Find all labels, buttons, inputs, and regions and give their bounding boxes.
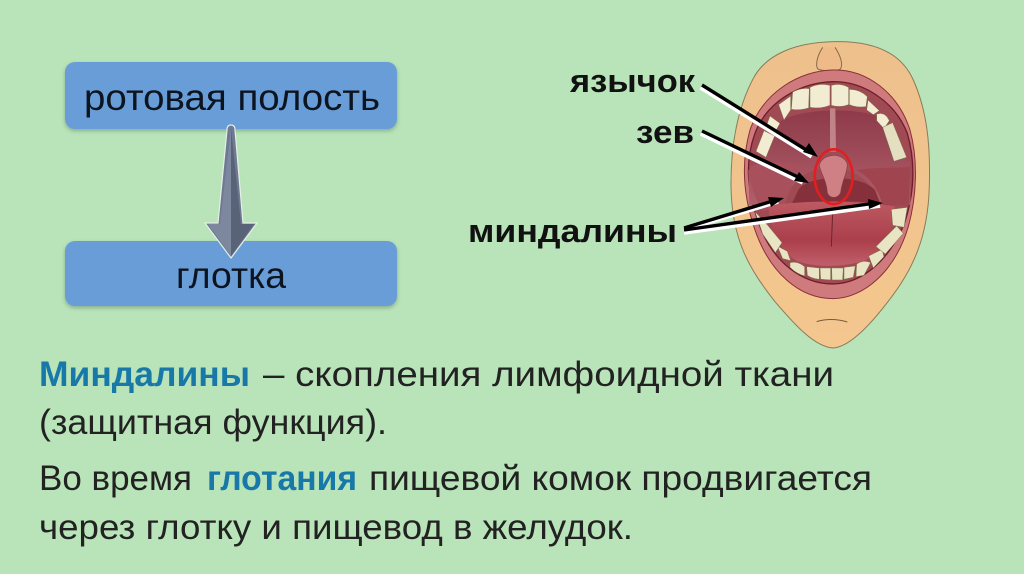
box: ротовая полость: ротовая полость [84,77,380,118]
label: язычок: язычок [569,63,696,99]
text block: миндалины: – скопления лимфоидной ткани [263,355,834,394]
tongue [768,202,895,266]
text block: глотание: глотания [207,459,357,498]
arrow: ротовая полость to глотка [205,125,257,258]
uvula [819,155,847,197]
text block: миндалины: (защитная функция). [39,403,387,442]
text block: глотание [39,459,872,547]
label: зев: зев [636,114,694,150]
tongue groove [831,213,833,247]
arrow: зев [701,131,809,183]
lower teeth [755,207,907,280]
chin crease [817,320,847,322]
side fold left [750,162,800,212]
red circle [815,149,853,204]
text block: глотание: через глотку и пищевод в желудок. [39,508,633,547]
arrow: язычок [701,85,818,157]
label: миндалины: миндалины [468,213,677,249]
mouth interior [748,82,913,284]
side fold right [857,167,910,205]
nose [817,47,842,71]
palate midline [830,108,836,152]
text block: глотание: Во время [39,459,192,498]
box: глотка [65,241,397,306]
box: глотка: глотка [176,255,286,296]
box: ротовая полость [65,62,397,129]
arrows: миндалины [684,197,883,232]
text block: миндалины [39,355,834,442]
throat [792,178,880,204]
upper teeth [756,84,907,161]
face skin [731,42,930,348]
mouth illustration [731,42,930,348]
palate [748,110,911,205]
lips [744,70,915,299]
text block: миндалины: Миндалины [39,355,250,394]
text block: глотание: пищевой комок продвигается [369,459,872,498]
